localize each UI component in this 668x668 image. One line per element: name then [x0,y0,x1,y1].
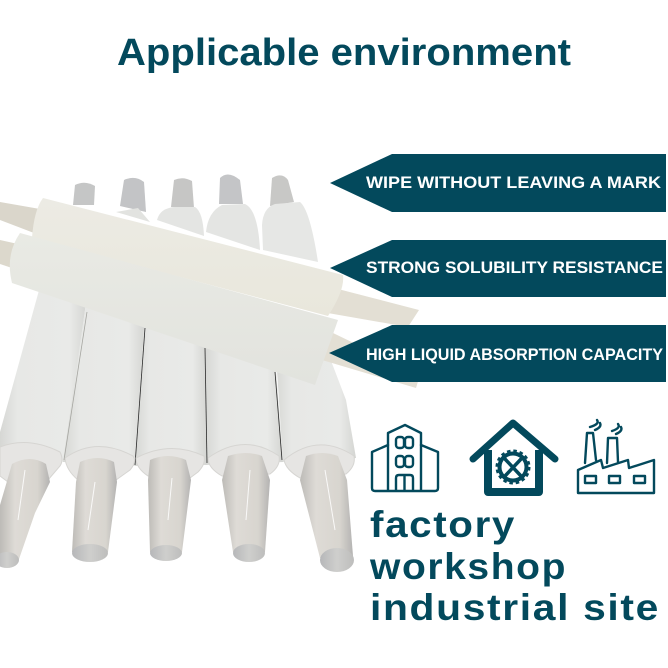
callout: high liquid absorption capacity [329,325,666,382]
horizontal roller, front [10,233,338,385]
icon: factory building [372,425,438,491]
text: factory: factory [370,504,516,545]
icon: workshop house with gear [473,423,555,492]
roller tips [0,544,354,572]
upper ends of upright rollers [73,174,318,262]
photo: product rollers [0,174,420,572]
shafts of horizontal rollers [0,202,420,388]
callout: strong solubility resistance: STRONG SOLUBILITY RESISTANCE [366,258,663,277]
text: industrial site: industrial site [370,587,660,628]
icon: factory with chimneys [578,420,654,493]
title: Applicable environment [117,32,571,74]
callout: wipe without leaving a mark [330,154,666,212]
callout: wipe without leaving a mark: WIPE WITHOUT LEAVING A MARK [366,173,662,192]
dark gaps between rollers [64,312,282,465]
flanges [0,443,354,482]
horizontal roller, back [32,198,343,316]
lower necks of rollers [0,453,353,566]
highlights on necks [18,470,335,530]
callout: strong solubility resistance [330,240,666,297]
upright roller bodies [0,283,356,466]
text: workshop: workshop [369,546,567,587]
